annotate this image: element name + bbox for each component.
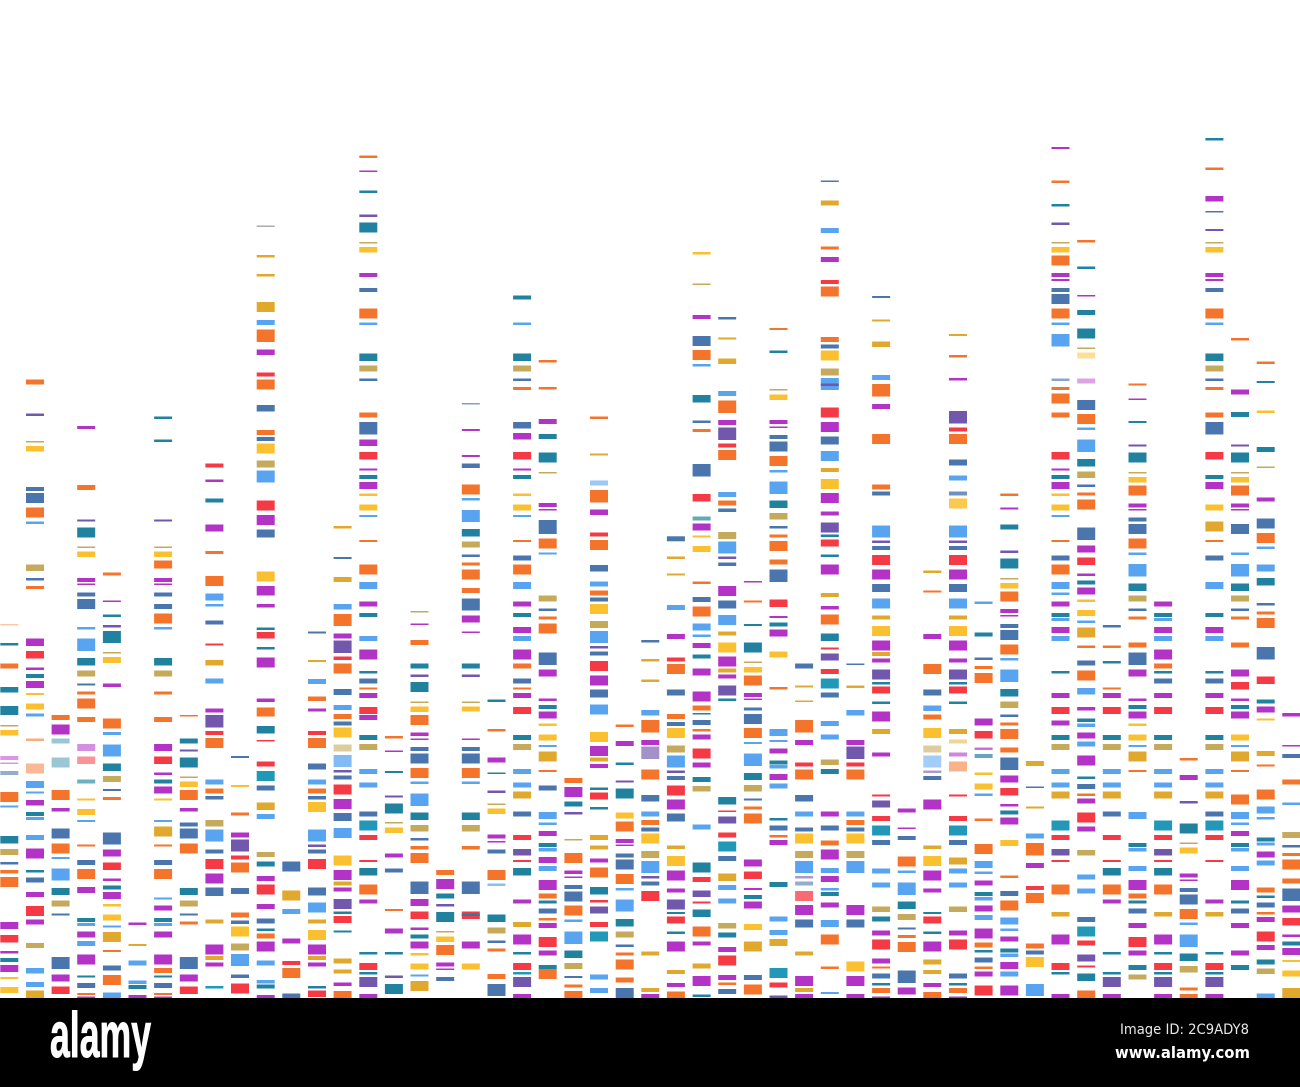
gel lane 41 [1026,761,1044,996]
gel lane 17 [410,611,428,991]
gel lane 44 [1103,625,1121,998]
gel lane 46 [1154,602,1172,998]
gel lane 6 [128,922,146,998]
gel lane 23 [564,778,582,998]
gel lane 49 [1231,338,1249,970]
gel lane 15 [359,156,377,998]
gel lane 16 [385,736,403,994]
gel lane 36 [898,808,916,994]
gel lane 10 [231,756,249,994]
image id: Image ID: 2C9ADY8 [1120,1022,1249,1038]
gel lane 26 [641,640,659,998]
gel lane 11 [257,226,275,998]
gel lane 40 [1000,494,1018,996]
website url: www.alamy.com [1115,1043,1250,1062]
gel lane 29 [718,317,736,994]
gel lane 47 [1180,758,1198,998]
logo: alamy [50,999,151,1071]
gel lane 7 [154,416,172,998]
gel lane 19 [462,403,480,970]
gel lane 27 [667,536,685,998]
gel lane 37 [923,570,941,998]
gel lane 25 [616,724,634,998]
gel lane 24 [590,416,608,993]
gel lane 21 [513,296,531,998]
gel lane 20 [488,700,506,996]
gel lane 14 [334,526,352,998]
gel lane 4 [77,426,95,998]
gel lane 9 [205,464,223,988]
gel lane 22 [539,360,557,979]
gel lane 45 [1128,384,1146,980]
gel lane 39 [975,602,993,996]
gel lane 48 [1205,138,1223,998]
gel lane 3 [52,715,70,994]
gel lane 42 [1052,147,1070,998]
gel lane 33 [821,180,839,994]
gel lane 12 [282,862,300,998]
gel lane 34 [846,664,864,998]
gel lane 51 [1282,713,1300,998]
gel lane 8 [180,715,198,994]
gel lane 1 [0,624,18,993]
gel lane 18 [436,870,454,981]
gel lane 13 [308,632,326,997]
gel lane 35 [872,296,890,998]
gel lane 31 [770,328,788,998]
gel lane 50 [1257,362,1275,998]
gel lane 38 [949,334,967,998]
gel lane 28 [693,252,711,997]
gel lane 43 [1077,240,1095,998]
gel lane 5 [103,572,121,998]
gel lane 2 [26,380,44,998]
gel lane 32 [795,664,813,998]
footer bar [0,998,1300,1087]
gel lane 30 [744,581,762,994]
